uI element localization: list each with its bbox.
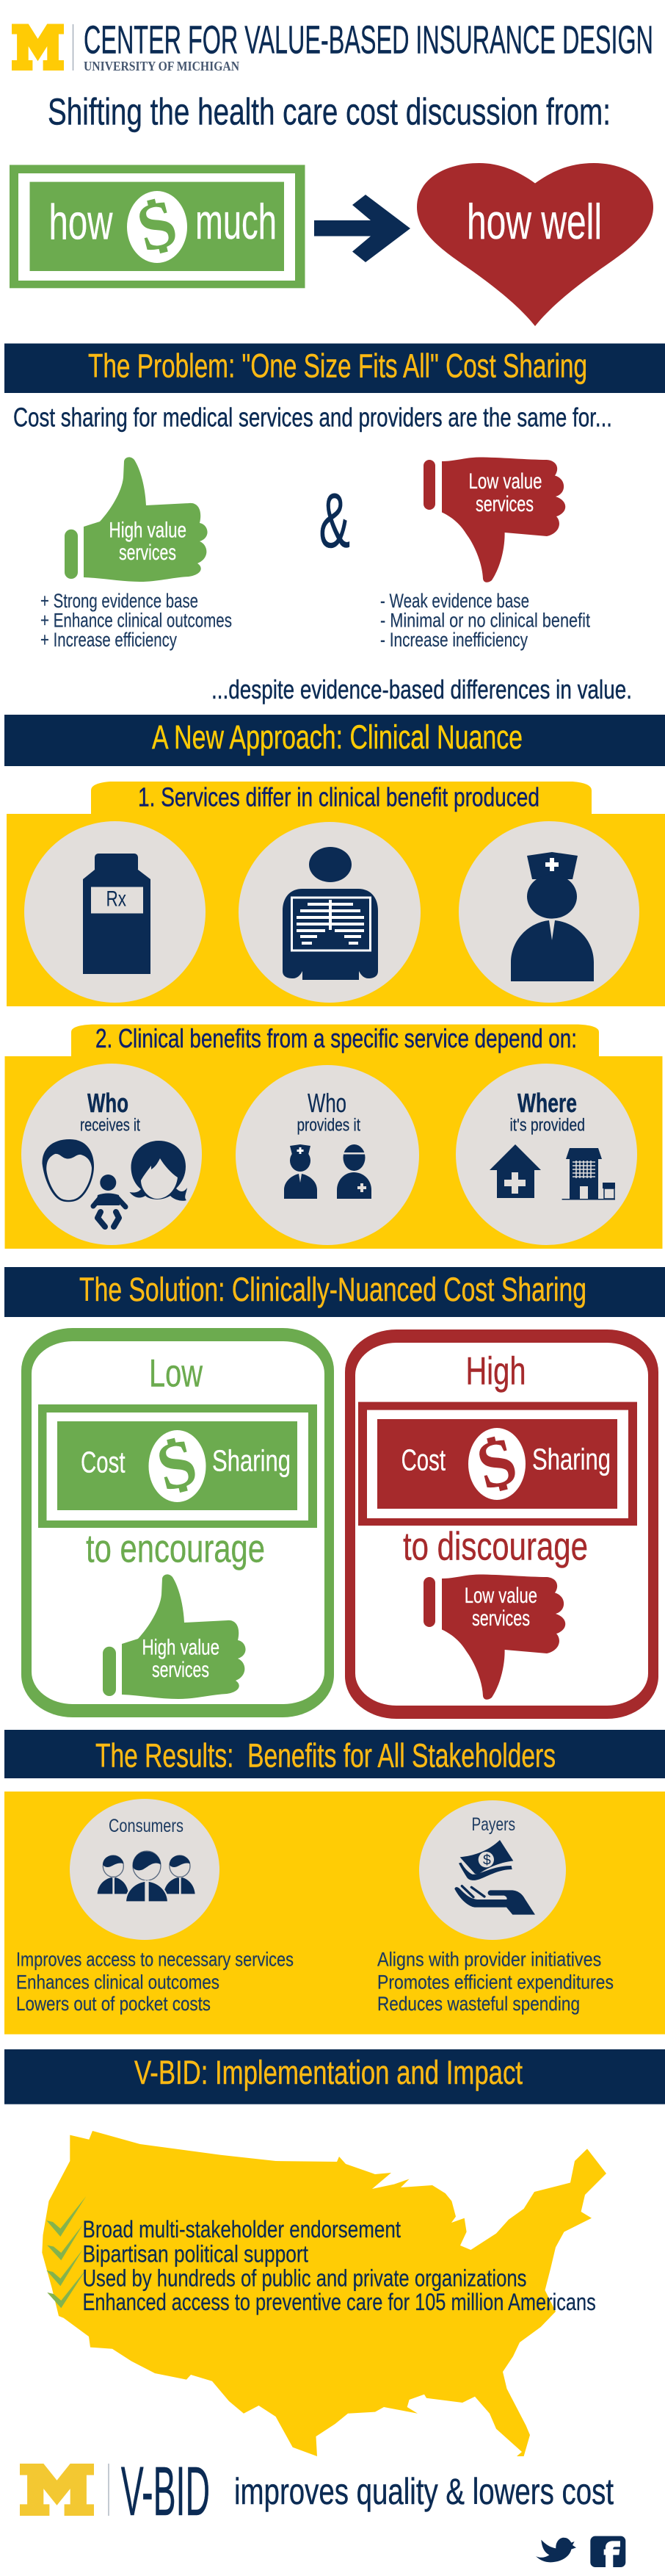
icon: nurse: [511, 852, 594, 981]
icon: chest x-ray person: [283, 847, 378, 980]
header logo and title: [12, 18, 653, 73]
icon: nurse and doctor: [284, 1144, 371, 1199]
text: who receives it: [80, 1088, 140, 1135]
icon: dollar sign: S: [130, 184, 184, 267]
icon: thumbs down low value: services: [476, 492, 534, 516]
text: high: High: [465, 1350, 526, 1393]
text: where it's provided: [509, 1088, 585, 1135]
icon: check marks: [46, 2196, 87, 2308]
person: right: [164, 1855, 195, 1894]
icon: prescription bottle: [83, 854, 150, 974]
banner: a new approach: A New Approach: Clinical Nuance: [152, 718, 523, 756]
list: low value attributes: - Weak evidence base: [380, 590, 529, 612]
subtitle: university: UNIVERSITY OF MICHIGAN: [84, 59, 239, 73]
banner: a new approach: [4, 715, 665, 766]
icon: dollar sign: S: [150, 1424, 204, 1506]
list: implementation checkmarks and text: Bipartisan political support: [82, 2240, 308, 2267]
list: payer benefits: Reduces wasteful spending: [377, 1993, 580, 2015]
text: low: Low: [149, 1352, 203, 1396]
icon: thumbs up high value: services: [119, 541, 176, 565]
list: consumer benefits: Enhances clinical outcomes: [16, 1971, 219, 1994]
panel: services differ: [7, 782, 665, 1006]
person: left: [98, 1855, 128, 1894]
panel: how much banknote: [10, 165, 305, 288]
icon: block M logo: [12, 24, 64, 71]
banknote: cost sharing red: Sharing: [532, 1442, 611, 1476]
banner: implementation and impact: V-BID: Implementation and Impact: [134, 2054, 523, 2091]
text: where it's provided: it's provided: [509, 1115, 585, 1135]
icon: twitter bird: [536, 2538, 576, 2562]
list: consumer benefits: [16, 1949, 294, 2015]
panel: low cost sharing: [21, 1328, 334, 1717]
icon: family faces: [42, 1139, 187, 1227]
panel: high cost sharing: [345, 1330, 658, 1719]
banknote: cost sharing green: Cost: [81, 1446, 126, 1479]
icon: money over hand: $: [483, 1853, 491, 1869]
icon: thumbs down low value: [424, 457, 565, 582]
panel: clinical benefits depend on: [4, 1023, 662, 1249]
icon: thumbs down: [424, 1575, 565, 1700]
banknote: cost sharing red: [358, 1402, 637, 1526]
list: implementation checkmarks and text: Broad multi-stakeholder endorsement: [82, 2216, 401, 2243]
list: high value attributes: + Enhance clinical outcomes: [40, 610, 232, 632]
map: United States: [42, 2131, 606, 2456]
icon: thumbs up high value: High value: [109, 518, 186, 542]
text: who provides it: [297, 1088, 360, 1135]
list: low value attributes: - Minimal or no clinical benefit: [380, 610, 590, 632]
icon: thumbs up: High value: [142, 1635, 219, 1659]
footer logo: M V-BID: [20, 2453, 210, 2530]
icon: thumbs down: services: [472, 1606, 530, 1631]
banknote: cost sharing red: Cost: [401, 1443, 446, 1477]
icon: clinic and hospital: [490, 1144, 615, 1200]
text: where it's provided: Where: [517, 1088, 577, 1118]
list: payer benefits: Promotes efficient expenditures: [377, 1971, 614, 1994]
list: payer benefits: [377, 1949, 614, 2015]
banner: the problem: [4, 344, 665, 393]
icon: three people: [98, 1851, 195, 1902]
ampersand: &: [319, 477, 350, 564]
list: high value attributes: [40, 590, 232, 651]
heading: services differ: 1. Services differ in clinical benefit produced: [138, 782, 539, 812]
icon: dollar sign: S: [470, 1422, 524, 1504]
text: to discourage: to discourage: [403, 1525, 588, 1569]
text: how well: how well: [467, 194, 602, 250]
arrow: [314, 195, 410, 262]
text: much: much: [195, 194, 277, 250]
icon: facebook: [590, 2536, 625, 2567]
text: consumers: Consumers: [109, 1816, 183, 1836]
text: payers: Payers: [471, 1814, 515, 1835]
banner: the results: [4, 1730, 665, 1778]
icon: thumbs up high value: [65, 457, 208, 582]
list: implementation checkmarks and text: [46, 2196, 596, 2315]
text: V-BID: [121, 2453, 210, 2530]
list: high value attributes: + Increase efficiency: [40, 629, 177, 651]
text: who provides it: Who: [308, 1088, 346, 1118]
icon: thumbs down low value: Low value: [468, 469, 542, 494]
panel: stakeholder benefits: [4, 1792, 665, 2035]
text: who receives it: Who: [87, 1088, 128, 1118]
list: payer benefits: Aligns with provider initiatives: [377, 1949, 601, 1971]
list: low value attributes: - Increase inefficiency: [380, 629, 528, 651]
list: low value attributes: [380, 590, 590, 651]
text: to encourage: to encourage: [86, 1527, 265, 1571]
banknote: cost sharing green: Sharing: [212, 1444, 291, 1478]
text: who receives it: receives it: [80, 1115, 140, 1135]
banner: the solution: [4, 1267, 665, 1317]
list: implementation checkmarks and text: Used by hundreds of public and private organizations: [82, 2265, 527, 2292]
list: high value attributes: + Strong evidence base: [40, 590, 198, 612]
icon: thumbs up: [103, 1574, 246, 1699]
list: consumer benefits: Lowers out of pocket costs: [16, 1993, 211, 2015]
person: center: [126, 1851, 168, 1902]
icon: prescription bottle: Rx: [106, 887, 126, 912]
banner: implementation and impact: [4, 2049, 665, 2104]
icon: thumbs down: Low value: [465, 1584, 537, 1608]
text: who provides it: provides it: [297, 1115, 360, 1135]
banknote: cost sharing green: [38, 1404, 317, 1528]
icon: money over hand: [454, 1840, 535, 1915]
list: consumer benefits: Improves access to necessary services: [16, 1949, 294, 1971]
icon: heart how well: [417, 163, 653, 326]
icon: thumbs up: services: [152, 1658, 209, 1682]
text: how: how: [48, 194, 113, 250]
